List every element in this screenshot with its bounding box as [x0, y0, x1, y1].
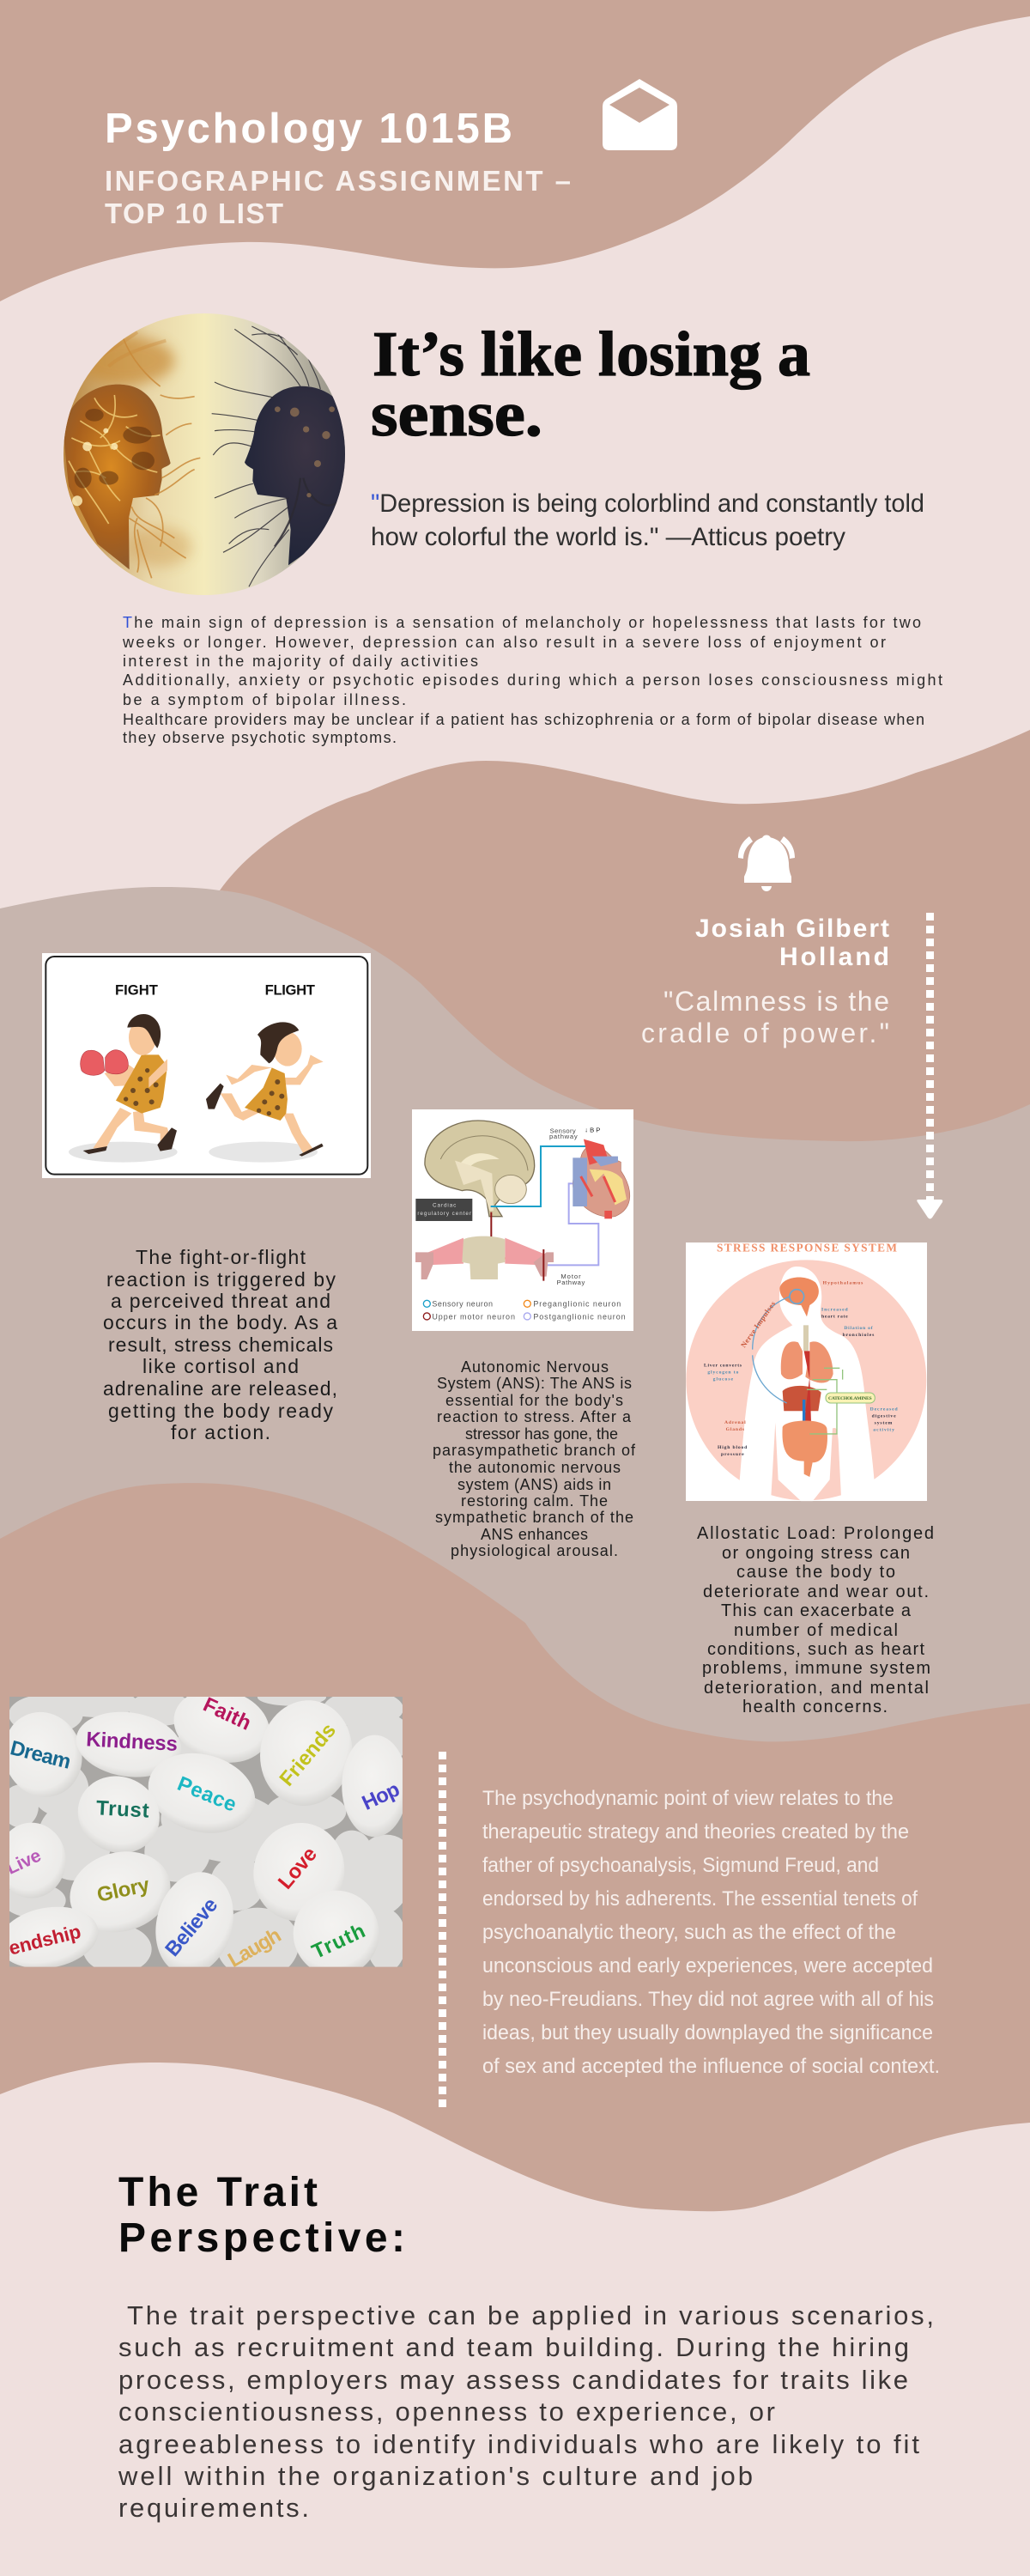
labels: system — [875, 1421, 893, 1426]
paragraph: depression: Additionally, anxiety or psychotic episodes during which a person loses consciousness might — [123, 671, 942, 689]
text: allostatic load: Allostatic Load: Prolonged — [697, 1524, 934, 1543]
bottom section background — [0, 2063, 1030, 2576]
image: word stones — [9, 1697, 403, 1967]
figure: fighter — [81, 1014, 177, 1154]
text: ANS: sympathetic branch of the — [435, 1509, 633, 1526]
subtitle: TOP 10 LIST — [105, 197, 283, 229]
body silhouette — [738, 1267, 876, 1501]
spinal cord — [425, 1238, 543, 1265]
headline: It’s like losing a — [373, 319, 810, 390]
text: ANS: restoring calm. The — [461, 1492, 608, 1510]
image: autonomic nervous system: Preganglionic neuron — [533, 1300, 621, 1309]
text: fight-or-flight: The fight-or-flight — [136, 1246, 306, 1268]
lower wave — [0, 1483, 1030, 2233]
dark branches — [212, 326, 341, 586]
text: allostatic load: health concerns. — [742, 1698, 888, 1716]
stone words: Hop — [359, 1777, 403, 1815]
text: fight-or-flight: adrenaline are released, — [103, 1377, 337, 1400]
label: fight: FIGHT — [115, 982, 158, 999]
labels: glucose — [713, 1377, 733, 1382]
quote: Josiah Gilbert Holland: "Calmness is the — [663, 986, 889, 1017]
stone words: Love — [274, 1843, 322, 1894]
text: ANS: essential for the body's — [445, 1392, 623, 1409]
text: ANS: physiological arousal. — [451, 1542, 618, 1559]
paragraph: depression: they observe psychotic symptoms. — [123, 729, 397, 746]
title — [105, 106, 571, 229]
stone words: Laugh — [224, 1923, 285, 1972]
quote: Atticus: how colorful the world is." —Atticus poetry — [371, 523, 845, 551]
brain — [425, 1121, 535, 1217]
labels: Decreased — [870, 1407, 898, 1413]
divider: dotted — [439, 1752, 446, 2107]
image: fight or flight — [42, 953, 371, 1178]
text: fight-or-flight: reaction is triggered by — [106, 1268, 336, 1291]
stone words: Believe — [161, 1893, 222, 1961]
image: autonomic nervous system: Cardiac — [433, 1202, 456, 1208]
quote: Josiah Gilbert Holland: Holland — [779, 943, 889, 971]
text: allostatic load — [697, 1524, 934, 1716]
quote wave — [220, 730, 1030, 1141]
subtitle: INFOGRAPHIC ASSIGNMENT – — [105, 165, 571, 197]
heading: the trait perspective: The Trait — [118, 2170, 318, 2215]
text: allostatic load: or ongoing stress can — [722, 1544, 910, 1563]
stone words: Kindness — [86, 1728, 179, 1756]
system title: STRESS RESPONSE SYSTEM — [717, 1241, 897, 1254]
image: autonomic nervous system — [412, 1109, 633, 1331]
text: trait perspective — [118, 2300, 934, 2523]
header wave — [0, 0, 1030, 301]
text: trait perspective: The trait perspective can be applied in various scenarios, — [127, 2300, 934, 2330]
image: autonomic nervous system: Pathway — [557, 1279, 585, 1286]
quote: Atticus — [371, 489, 924, 551]
text: ANS — [433, 1358, 636, 1559]
labels: Sensory — [550, 1127, 576, 1134]
text: allostatic load: conditions, such as heart — [707, 1640, 924, 1659]
text: fight-or-flight: like cortisol and — [142, 1355, 299, 1377]
stone words: Dream — [8, 1736, 73, 1774]
arrow: dotted down — [917, 913, 942, 1219]
text: allostatic load: This can exacerbate a — [721, 1601, 912, 1620]
text: psychodynamic: psychoanalytic theory, such as the effect of the — [482, 1921, 896, 1944]
labels: digestive — [872, 1414, 896, 1419]
paragraph: depression: interest in the majority of daily activities — [123, 653, 478, 670]
labels: Adrenal — [724, 1420, 746, 1425]
quote: Atticus: "Depression is being colorblind and constantly told — [371, 489, 924, 518]
orange branches — [101, 331, 201, 579]
labels: pressure — [721, 1452, 744, 1457]
icon: envelope — [603, 79, 677, 150]
headline — [371, 319, 810, 450]
image: autonomic nervous system: Sensory neuron — [432, 1300, 493, 1309]
stone words: iendship — [2, 1920, 83, 1960]
figure: runner — [206, 1022, 324, 1157]
text: trait perspective: requirements. — [118, 2493, 309, 2523]
text: fight-or-flight: for action. — [171, 1421, 270, 1443]
stone words: Trust — [95, 1796, 149, 1823]
text: fight-or-flight: result, stress chemicals — [108, 1334, 333, 1356]
labels: Hypothalamus — [823, 1281, 863, 1286]
text: allostatic load: problems, immune system — [702, 1659, 930, 1678]
labels: activity — [873, 1428, 894, 1433]
text: allostatic load: number of medical — [734, 1621, 898, 1640]
text: ANS: parasympathetic branch of — [433, 1442, 636, 1459]
text: trait perspective: agreeableness to identify individuals who are likely to fit — [118, 2429, 919, 2459]
orange head — [63, 385, 171, 569]
heading: the trait perspective: Perspective: — [118, 2215, 405, 2261]
image: autonomic nervous system: Postganglionic neuron — [533, 1312, 626, 1321]
quote: Josiah Gilbert Holland: Josiah Gilbert — [695, 914, 889, 943]
stone words: Faith — [199, 1693, 255, 1735]
image: stress response system — [686, 1241, 927, 1501]
stone words: Glory — [95, 1873, 152, 1907]
heading: the trait perspective — [118, 2170, 405, 2261]
text: ANS: stressor has gone, the — [465, 1425, 618, 1443]
text: psychodynamic: unconscious and early experiences, were accepted — [482, 1954, 933, 1978]
text: ANS: system (ANS) aids in — [457, 1476, 611, 1493]
text: trait perspective: well within the organization's culture and job — [118, 2461, 753, 2491]
image: stress response system: CATECHOLAMINES — [828, 1396, 872, 1401]
text: psychodynamic — [482, 1787, 940, 2078]
text: trait perspective: such as recruitment and team building. During the hiring — [118, 2332, 909, 2362]
labels: Nerve Impulses — [739, 1299, 778, 1349]
heart — [573, 1145, 630, 1217]
subtitle — [105, 165, 571, 229]
text: psychodynamic: The psychodynamic point of view relates to the — [482, 1787, 894, 1810]
labels: bronchioles — [843, 1333, 875, 1338]
text: psychodynamic: of sex and accepted the influence of social context. — [482, 2055, 940, 2078]
text: ANS: reaction to stress. After a — [437, 1408, 632, 1425]
paragraph: depression: be a symptom of bipolar illness. — [123, 691, 406, 708]
organs — [779, 1278, 819, 1316]
text: psychodynamic: therapeutic strategy and theories created by the — [482, 1820, 909, 1844]
text: psychodynamic: ideas, but they usually downplayed the significance — [482, 2021, 933, 2044]
labels: Dilation of — [844, 1326, 873, 1331]
text: fight-or-flight: getting the body ready — [108, 1400, 333, 1422]
text: psychodynamic: father of psychoanalysis, Sigmund Freud, and — [482, 1854, 879, 1877]
navy head — [245, 386, 346, 565]
title: Psychology 1015B — [105, 106, 512, 152]
text: ANS: the autonomic nervous — [449, 1459, 621, 1476]
text: fight-or-flight: occurs in the body. As a — [103, 1311, 337, 1334]
stone words: Live — [3, 1844, 45, 1879]
labels: Glands — [726, 1427, 745, 1432]
image: autonomic nervous system: regulatory center — [417, 1211, 471, 1217]
paragraph: depression — [122, 614, 942, 746]
labels: Increased — [821, 1308, 848, 1313]
stone words: Peace — [174, 1772, 239, 1817]
catecholamines label — [826, 1393, 875, 1403]
text: psychodynamic: endorsed by his adherents. The essential tenets of — [482, 1887, 918, 1911]
orange haze — [52, 337, 191, 567]
neuron paths — [491, 1146, 588, 1206]
icon: bell — [738, 835, 795, 891]
text: ANS: Autonomic Nervous — [461, 1358, 609, 1376]
text: allostatic load: deterioration, and mental — [704, 1679, 929, 1698]
text: psychodynamic: by neo-Freudians. They did not agree with all of his — [482, 1988, 934, 2011]
paragraph: depression: weeks or longer. However, depression can also result in a severe loss of enjoyment or — [122, 634, 886, 651]
labels: glycogen to — [707, 1370, 738, 1376]
image: autonomic nervous system: pathway — [549, 1133, 578, 1140]
paragraph: depression: The main sign of depression is a sensation of melancholy or hopelessness that lasts for two — [123, 614, 921, 631]
image: autonomic nervous system: ↓BP — [585, 1126, 600, 1133]
image: autonomic nervous system: Upper motor neuron — [432, 1312, 515, 1321]
text: allostatic load: deteriorate and wear out. — [703, 1583, 929, 1601]
stone words: Friends — [276, 1719, 341, 1791]
text: fight-or-flight — [103, 1246, 337, 1443]
text: ANS: ANS enhances — [481, 1526, 588, 1543]
cardiac label — [415, 1199, 472, 1221]
image: autonomic nervous system: Motor — [560, 1273, 581, 1280]
label: flight: FLIGHT — [265, 982, 315, 999]
middle grey band — [0, 887, 1030, 1803]
labels: High blood — [718, 1445, 748, 1450]
text: ANS: System (ANS): The ANS is — [437, 1375, 632, 1392]
labels — [704, 1281, 898, 1457]
headline: sense. — [371, 380, 542, 450]
circular image: two heads — [52, 313, 346, 595]
quote: Josiah Gilbert Holland: cradle of power." — [641, 1018, 889, 1048]
quote: Josiah Gilbert Holland — [641, 914, 889, 1048]
paragraph: depression: Healthcare providers may be unclear if a patient has schizophrenia or a form of bipolar disease when — [123, 711, 924, 728]
text: allostatic load: cause the body to — [736, 1563, 895, 1582]
stone words: Truth — [308, 1919, 369, 1964]
text: trait perspective: process, employers may assess candidates for traits like — [118, 2365, 908, 2395]
text: trait perspective: conscientiousness, openness to experience, or — [118, 2397, 775, 2427]
labels: heart rate — [821, 1315, 848, 1320]
stone words — [2, 1693, 403, 1972]
text: fight-or-flight: a perceived threat and — [111, 1290, 330, 1312]
labels: Liver converts — [704, 1364, 742, 1369]
